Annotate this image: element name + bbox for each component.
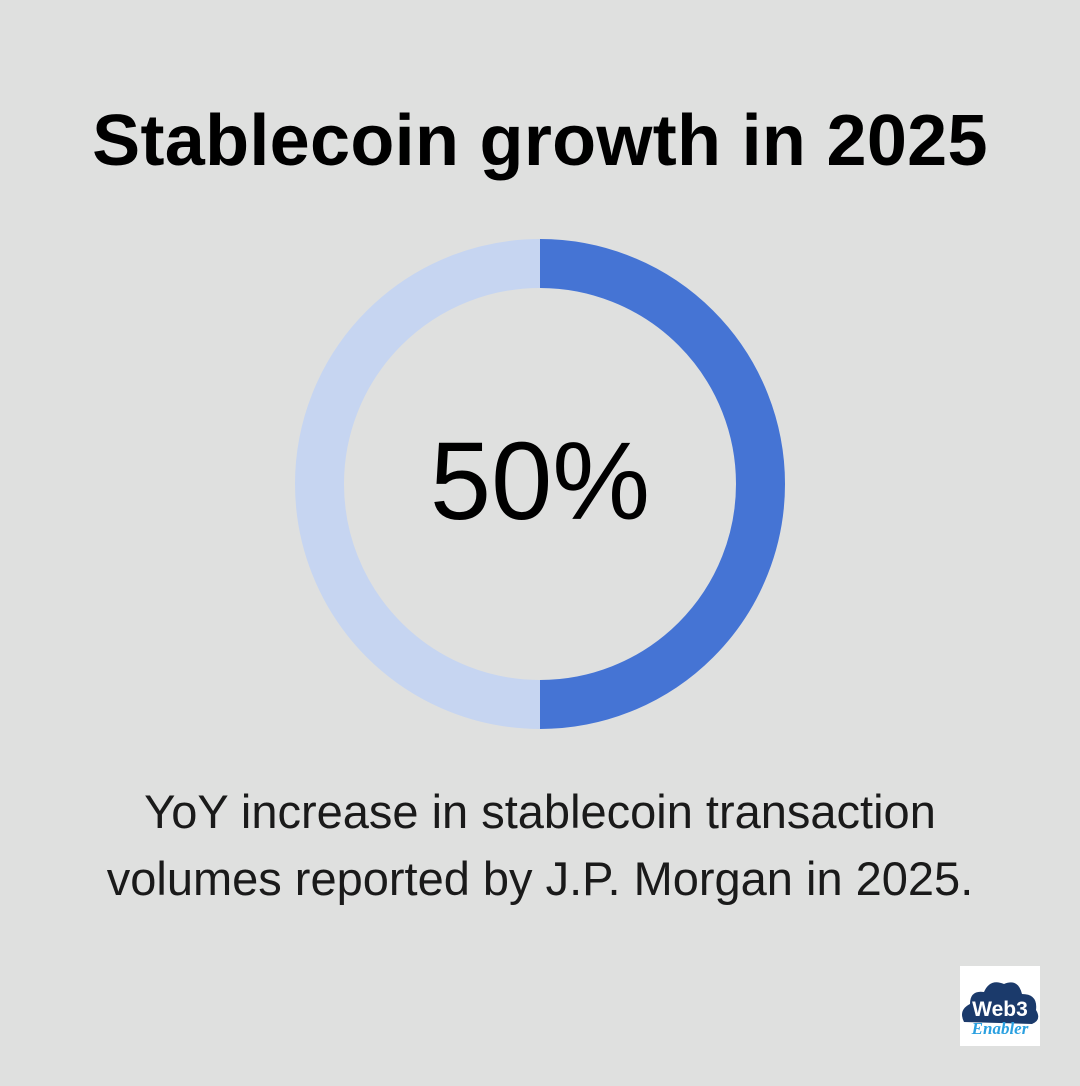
caption: volumes reported by J.P. Morgan in 2025. bbox=[107, 852, 973, 905]
value: 50%: 50% bbox=[430, 420, 650, 543]
logo: Web3 Enabler bbox=[960, 966, 1040, 1046]
caption bbox=[107, 785, 973, 905]
caption: YoY increase in stablecoin transaction bbox=[144, 785, 936, 838]
title: Stablecoin growth in 2025 bbox=[92, 101, 988, 181]
logo: Web3 Enabler: Enabler bbox=[971, 1019, 1029, 1038]
logo: Web3 Enabler: Web3 bbox=[972, 998, 1028, 1021]
